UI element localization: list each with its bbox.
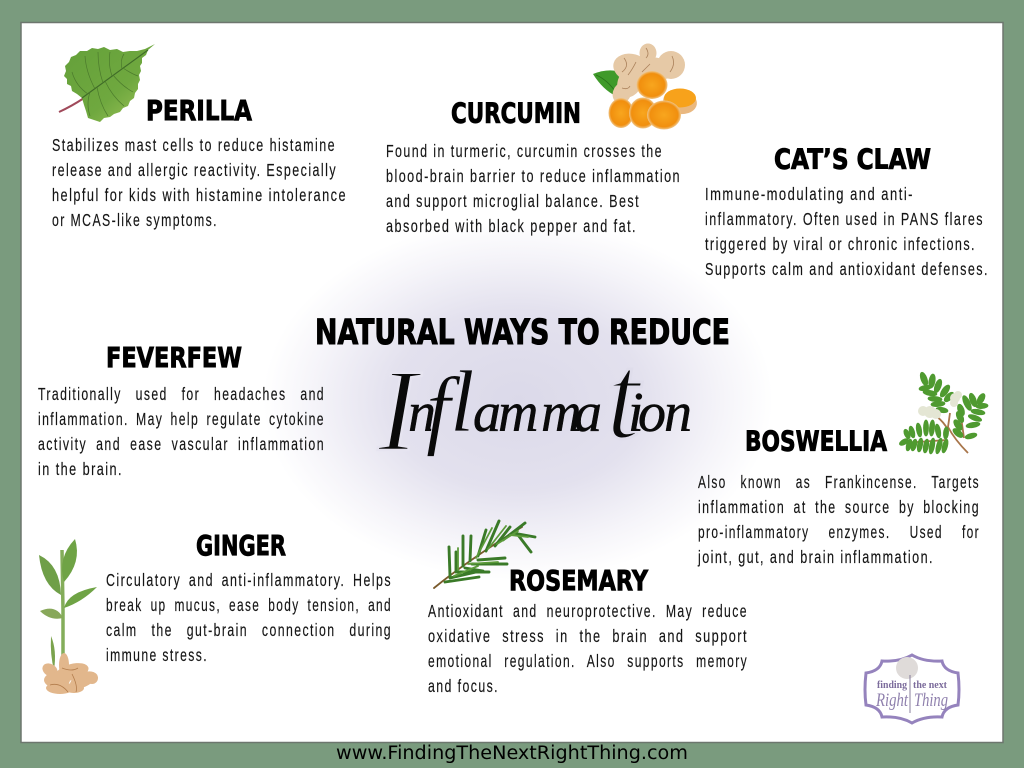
text block: Cat's Claw: Immune-modulating and anti- [705,184,914,204]
text block: Rosemary: and focus. [428,676,499,696]
logo: Finding the Next Right Thing: finding [877,680,908,691]
logo: Finding the Next Right Thing [865,655,959,723]
text block: Perilla: release and allergic reactivity. Especially [52,160,337,180]
text block: Curcumin: blood-brain barrier to reduce inflammation [386,166,681,186]
title: Inflammation: f [426,361,461,458]
text block: Boswellia [697,472,980,567]
text block: Feverfew: Traditionally used for headaches and [38,384,325,404]
text block: Rosemary: emotional regulation. Also supports memory [428,651,748,671]
title: Inflammation: on [638,382,692,444]
title: Inflammation: n [408,382,436,444]
text block: Ginger: break up mucus, ease body tension, and [106,595,392,615]
text block: Ginger [106,570,392,665]
heading: Ginger: GINGER [196,530,286,562]
text block: Ginger: immune stress. [106,645,208,665]
title: Inflammation: a [473,382,501,444]
text block: Rosemary: Antioxidant and neuroprotective. May reduce [428,601,748,621]
title: Inflammation: I [377,345,422,476]
heading: Feverfew: FEVERFEW [106,342,242,374]
title: Inflammation [377,330,692,476]
icon: ginger plant [39,539,99,694]
title: Inflammation: i [628,382,644,444]
text block: Ginger: calm the gut-brain connection during [106,620,392,640]
logo: Finding the Next Right Thing: Thing [914,690,948,711]
text block: Feverfew: activity and ease vascular inflammation [38,434,325,454]
heading: Perilla: PERILLA [146,95,253,127]
logo: Finding the Next Right Thing: the next [913,680,947,691]
title: Inflammation: t [606,330,643,465]
text block: Ginger: Circulatory and anti-inflammatory. Helps [106,570,392,590]
central lavender glow [263,220,773,580]
icon: rosemary sprig [434,521,535,588]
text block: Feverfew: in the brain. [38,459,123,479]
heading: Boswellia: BOSWELLIA [745,426,888,458]
title: Inflammation: mma [498,382,602,444]
heading: Curcumin: CURCUMIN [451,98,581,130]
heading: Rosemary: ROSEMARY [509,565,649,597]
text block: Perilla: Stabilizes mast cells to reduce histamine [52,135,336,155]
text block: Curcumin: Found in turmeric, curcumin crosses the [386,141,663,161]
text block: Perilla [52,135,347,230]
text block: Perilla: helpful for kids with histamine intolerance [52,185,347,205]
icon: turmeric [593,44,699,130]
icon: boswellia sprig [898,371,988,454]
text block: Rosemary: oxidative stress in the brain and support [428,626,748,646]
logo: Finding the Next Right Thing: Right [875,690,909,711]
footer: website URL: www.FindingTheNextRightThing.com [336,743,688,764]
text block: Curcumin: and support microglial balance. Best [386,191,640,211]
text block: Boswellia: joint, gut, and brain inflammation. [697,547,934,567]
icon: perilla leaf [59,44,155,122]
text block: Feverfew [38,384,325,479]
text block: Rosemary [428,601,748,696]
title: Natural Ways to Reduce: NATURAL WAYS TO REDUCE [315,313,730,353]
text block: Perilla: or MCAS-like symptoms. [52,210,218,230]
text block: Cat's Claw [705,184,989,279]
text block: Curcumin [386,141,681,236]
title: Inflammation: l [450,354,474,451]
text block: Feverfew: inflammation. May help regulate cytokine [38,409,325,429]
text block: Curcumin: absorbed with black pepper and fat. [386,216,637,236]
heading: Cat's Claw: CAT’S CLAW [774,144,931,176]
